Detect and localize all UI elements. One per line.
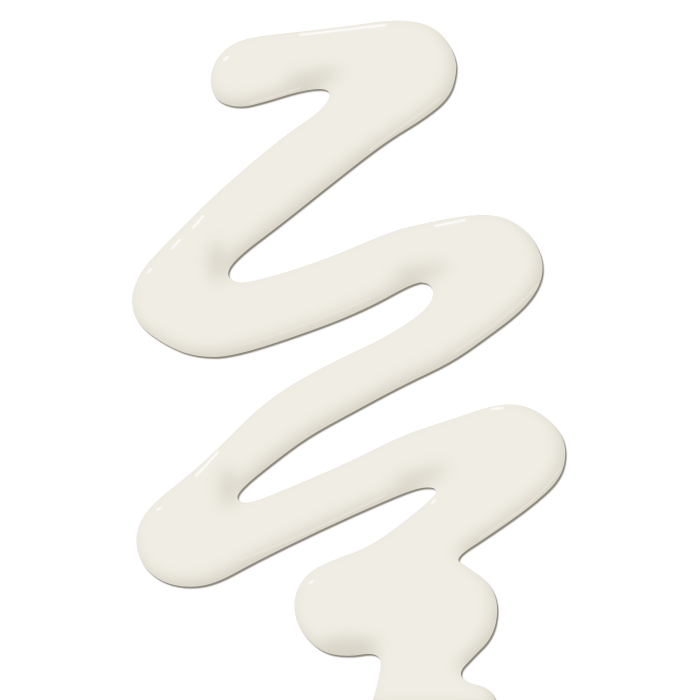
glossy highlights — [148, 25, 503, 583]
cream swirl — [132, 20, 568, 700]
cream body with shading — [132, 20, 566, 700]
drop shadow along lower edges — [134, 23, 567, 700]
